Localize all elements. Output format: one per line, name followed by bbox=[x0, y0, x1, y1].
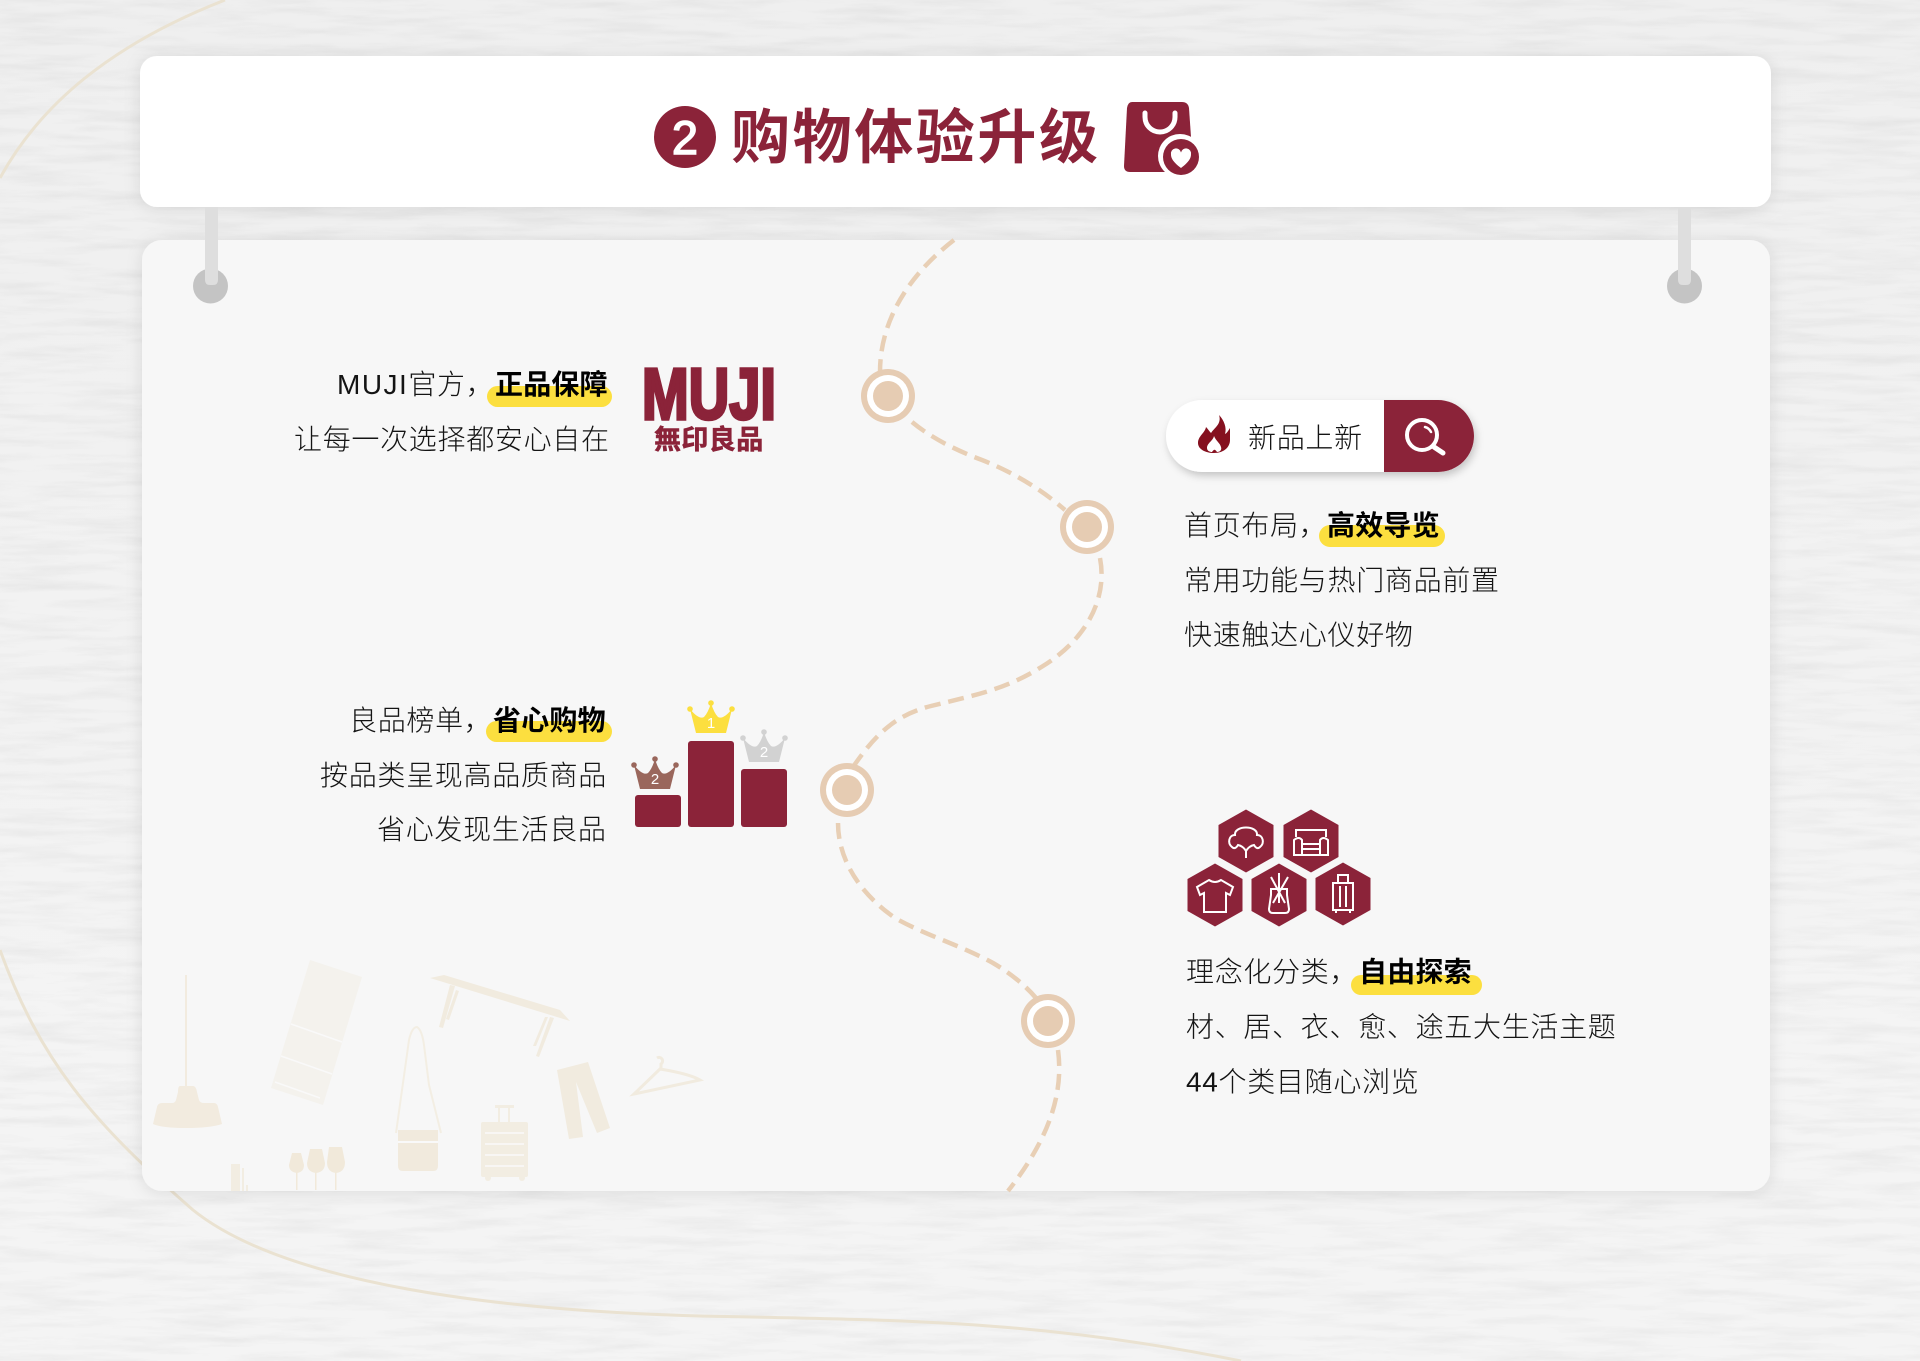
icon: suitcase bbox=[481, 1105, 528, 1181]
silver crown: 2 bbox=[760, 744, 768, 761]
furniture watermark bbox=[153, 960, 700, 1191]
text block: concept categories: 自由探索 bbox=[1359, 956, 1472, 988]
icon: pendant lamp bbox=[153, 975, 222, 1128]
icon: flame bbox=[1198, 415, 1230, 453]
gold crown bbox=[687, 700, 735, 733]
text block: homepage navigation: 常用功能与热门商品前置 bbox=[1184, 565, 1500, 596]
text block: curated rankings bbox=[320, 705, 612, 845]
hanger pin: left bbox=[193, 207, 228, 304]
text block: homepage navigation: 首页布局， bbox=[1184, 510, 1328, 541]
decorative background curves bbox=[0, 0, 1241, 1361]
icon: wine glasses bbox=[289, 1147, 345, 1190]
hex: cotton bbox=[1218, 810, 1274, 872]
route node 3 bbox=[820, 763, 874, 817]
icon: shopping bag with heart bbox=[1124, 102, 1202, 178]
bronze crown bbox=[631, 756, 679, 789]
hex: reed diffuser bbox=[1252, 864, 1306, 926]
hex: sofa bbox=[1284, 810, 1338, 872]
icon: refrigerator bbox=[271, 960, 362, 1105]
search bar bbox=[1166, 400, 1474, 472]
text block: genuine guarantee: MUJI官方， bbox=[337, 369, 494, 400]
number badge: 2 bbox=[672, 111, 698, 164]
text block: homepage navigation: 高效导览 bbox=[1327, 510, 1440, 541]
dashed route bbox=[838, 240, 1102, 1191]
route node 1 bbox=[861, 369, 915, 423]
hanger pin: right bbox=[1667, 207, 1702, 304]
text block: concept categories: 理念化分类， bbox=[1186, 956, 1358, 988]
text block: curated rankings: 良品榜单， bbox=[349, 705, 493, 736]
icon: bench table bbox=[430, 975, 570, 1057]
text block: concept categories: 材、居、衣、愈、途五大生活主题 bbox=[1186, 1012, 1617, 1042]
text block: curated rankings: 省心发现生活良品 bbox=[377, 814, 607, 845]
hex: t-shirt bbox=[1188, 864, 1242, 926]
text block: genuine guarantee: 让每一次选择都安心自在 bbox=[294, 424, 610, 455]
route node 2 bbox=[1060, 500, 1114, 554]
icon: trousers bbox=[557, 1062, 610, 1139]
text block: homepage navigation: 快速触达心仪好物 bbox=[1184, 620, 1414, 650]
route node 4 bbox=[1021, 994, 1075, 1048]
text block: concept categories: 44个类目随心浏览 bbox=[1186, 1066, 1419, 1098]
MUJI logo: MUJI bbox=[642, 355, 776, 435]
text block: concept categories bbox=[1186, 956, 1617, 1098]
icon: shoulder bag bbox=[396, 1027, 441, 1171]
icon: books bbox=[231, 1164, 248, 1191]
title: 购物体验升级 bbox=[731, 105, 1101, 171]
hex: luggage bbox=[1316, 862, 1370, 926]
MUJI logo: 無印良品 bbox=[654, 418, 764, 457]
silver crown bbox=[740, 729, 788, 762]
gold crown: 1 bbox=[707, 715, 715, 732]
header panel bbox=[140, 56, 1771, 207]
text block: homepage navigation bbox=[1184, 510, 1500, 650]
text block: genuine guarantee bbox=[294, 369, 612, 455]
search label: 新品上新 bbox=[1248, 422, 1363, 454]
bronze crown: 2 bbox=[651, 771, 659, 788]
main panel bbox=[142, 240, 1770, 1191]
icon: coat hanger bbox=[634, 1057, 700, 1094]
podium icon bbox=[631, 700, 788, 827]
number badge bbox=[654, 106, 716, 168]
MUJI logo bbox=[642, 355, 776, 457]
text block: genuine guarantee: 正品保障 bbox=[495, 369, 608, 400]
text block: curated rankings: 按品类呈现高品质商品 bbox=[320, 760, 607, 791]
icon: magnifier bbox=[1407, 420, 1443, 453]
hexagon category icons bbox=[1188, 810, 1370, 926]
text block: curated rankings: 省心购物 bbox=[493, 705, 606, 736]
